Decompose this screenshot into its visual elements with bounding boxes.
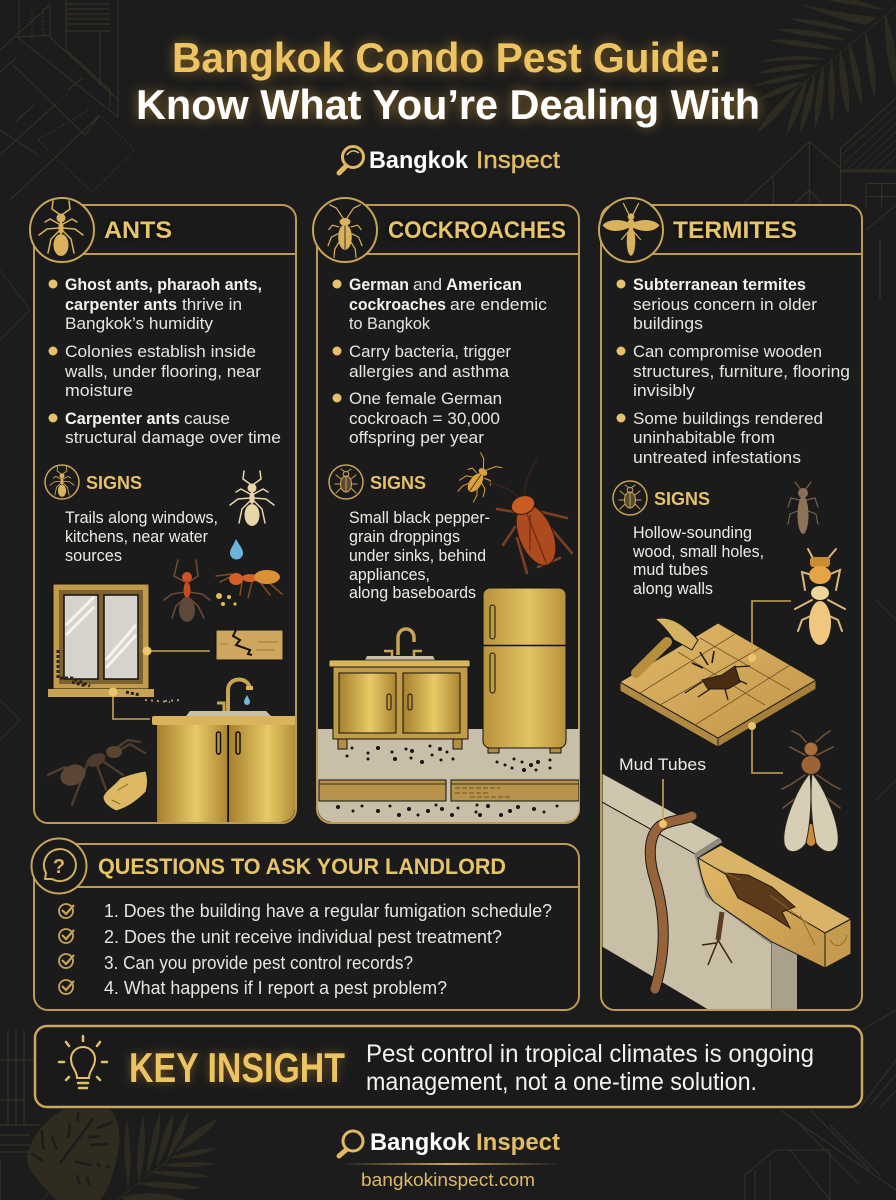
key insight message	[366, 1040, 814, 1096]
header logo: Bangkok	[369, 147, 469, 174]
signs text: termites	[632, 524, 764, 598]
heading: ants: ANTS	[104, 217, 172, 244]
ant facts: Carpenter ants	[65, 409, 180, 428]
termite facts: Some buildings rendered	[633, 409, 823, 428]
signs heading: ants: SIGNS	[86, 473, 142, 493]
signs text: termites: wood, small holes,	[632, 543, 764, 561]
panel: cockroaches	[313, 198, 579, 823]
cracked wood	[216, 630, 283, 660]
ant facts: thrive in	[182, 295, 242, 314]
heading: termites: TERMITES	[673, 217, 797, 244]
termite facts: uninhabitable from	[633, 428, 775, 447]
title	[136, 34, 760, 128]
icon: orange ant with crumbs	[216, 570, 282, 606]
signs text: termites: mud tubes	[633, 561, 708, 579]
refrigerator	[483, 588, 566, 753]
icon: winged termite	[782, 731, 840, 852]
cockroach facts: and	[413, 275, 442, 294]
icon: termite	[599, 198, 663, 262]
background pattern: bottom left grid	[0, 1030, 40, 1200]
background leaf: palm bottom left	[117, 1112, 218, 1200]
termite facts: serious concern in older	[633, 295, 817, 314]
wall and beam with mud tube	[602, 773, 851, 1010]
footer logo	[339, 1129, 560, 1156]
floor with baseboards	[318, 729, 579, 823]
icon: worker termite	[795, 549, 845, 645]
termite facts: untreated infestations	[633, 448, 801, 467]
ant facts: structural damage over time	[65, 428, 281, 447]
signs text: cockroaches: appliances,	[349, 566, 430, 584]
wood floor board with hammer	[620, 618, 816, 747]
ant facts: moisture	[65, 381, 133, 400]
signs heading: termites	[613, 481, 710, 515]
signs heading: ants	[45, 465, 142, 499]
ant facts: Bangkok’s humidity	[65, 314, 214, 333]
cockroach facts: cockroach = 30,000	[349, 409, 500, 428]
termite facts: Can compromise wooden	[633, 342, 822, 361]
heading: cockroaches: COCKROACHES	[388, 217, 566, 244]
termite facts: structures, furniture, flooring	[633, 362, 850, 381]
cockroach facts: offspring per year	[349, 428, 484, 447]
ant facts: cause	[184, 409, 230, 428]
cockroach facts: Carry bacteria, trigger	[349, 342, 511, 361]
signs text: ants: Trails along windows,	[65, 509, 218, 527]
header logo	[339, 146, 560, 174]
icon: question bubble: ?	[53, 856, 65, 878]
signs text: cockroaches: Small black pepper-	[349, 509, 490, 527]
question list: 3. Can you provide pest control records?	[104, 952, 413, 973]
icon: water drop	[230, 539, 243, 560]
connector lines	[108, 646, 210, 719]
background leaf: monstera bottom left	[27, 1109, 119, 1200]
kitchen cabinet and sink	[152, 680, 299, 823]
big brown ant with crumb	[48, 740, 148, 811]
termite facts: buildings	[633, 314, 703, 333]
question list: 2. Does the unit receive individual pest treatment?	[104, 926, 502, 947]
icon: red ant	[164, 560, 210, 622]
signs heading: termites: SIGNS	[654, 489, 710, 509]
signs text: termites: Hollow-sounding	[633, 524, 752, 542]
signs text: cockroaches: grain droppings	[349, 528, 460, 546]
icon: light bulb	[59, 1036, 107, 1088]
cockroach facts: are endemic	[450, 295, 548, 314]
signs heading: cockroaches	[329, 465, 426, 499]
icon: small termite	[788, 482, 818, 534]
footer logo: Bangkok	[370, 1129, 471, 1156]
signs text: ants	[65, 509, 218, 565]
icon: cockroach	[313, 198, 377, 262]
mud tubes label: Mud Tubes	[619, 756, 706, 774]
key insight heading: KEY INSIGHT	[129, 1044, 345, 1091]
panel: ants	[30, 198, 299, 823]
cockroach facts: German	[349, 275, 409, 294]
termite facts: invisibly	[633, 381, 696, 400]
cockroach facts: American	[446, 275, 522, 294]
footer logo: Inspect	[476, 1129, 560, 1156]
signs text: cockroaches	[349, 509, 490, 602]
droppings	[336, 744, 558, 817]
signs text: cockroaches: along baseboards	[349, 584, 476, 602]
background pattern: bottom right architecture	[745, 1060, 896, 1200]
cockroach facts	[332, 275, 548, 447]
background pattern: house top right	[743, 98, 896, 207]
key insight message: management, not a one-time solution.	[366, 1068, 757, 1096]
sink cabinet	[329, 629, 470, 749]
icon: ant	[30, 198, 94, 262]
question list: 4. What happens if I report a pest problem?	[104, 977, 447, 998]
signs heading: cockroaches: SIGNS	[370, 473, 426, 493]
icon: question bubble	[32, 838, 86, 894]
background pattern: right side	[862, 205, 896, 1105]
cockroach facts: to Bangkok	[349, 314, 430, 333]
window	[48, 584, 154, 697]
signs text: termites: along walls	[633, 580, 713, 598]
title: Know What You’re Dealing With	[136, 81, 760, 128]
signs text: cockroaches: under sinks, behind	[349, 547, 486, 565]
icon: pale ant	[230, 471, 274, 526]
termite facts	[616, 275, 850, 467]
panel: questions to ask your landlord	[32, 838, 579, 1010]
termite facts: Subterranean termites	[633, 275, 806, 294]
icon: footer magnifier	[339, 1131, 363, 1156]
question list: 1. Does the building have a regular fumigation schedule?	[104, 900, 552, 921]
cockroach facts: One female German	[349, 389, 502, 408]
question list	[59, 900, 552, 998]
signs text: ants: kitchens, near water	[65, 528, 208, 546]
key insight message: Pest control in tropical climates is ongoing	[366, 1040, 814, 1068]
ant facts: Ghost ants, pharaoh ants,	[65, 275, 262, 294]
title: Bangkok Condo Pest Guide:	[172, 34, 722, 81]
header logo: Inspect	[476, 147, 560, 174]
cockroach facts: allergies and asthma	[349, 362, 510, 381]
background leaf: palm top right	[753, 0, 896, 135]
cockroach facts: cockroaches	[349, 295, 446, 314]
icon: magnifier	[339, 146, 364, 173]
icon: large cockroach	[488, 458, 572, 573]
panel: key insight	[35, 1026, 862, 1107]
ant facts: carpenter ants	[65, 295, 177, 314]
connector lines: termite	[659, 601, 791, 828]
ant facts: Colonies establish inside	[65, 342, 256, 361]
footer website: bangkokinspect.com	[361, 1170, 535, 1190]
background pattern: art deco top left	[0, 0, 896, 800]
ant facts: walls, under flooring, near	[64, 362, 261, 381]
icon: hammer	[636, 618, 698, 673]
heading: questions: QUESTIONS TO ASK YOUR LANDLORD	[98, 854, 506, 879]
icon: small cockroach	[454, 452, 503, 505]
signs text: ants: sources	[65, 547, 122, 565]
ant facts	[48, 275, 281, 447]
panel: termites	[599, 198, 862, 1010]
